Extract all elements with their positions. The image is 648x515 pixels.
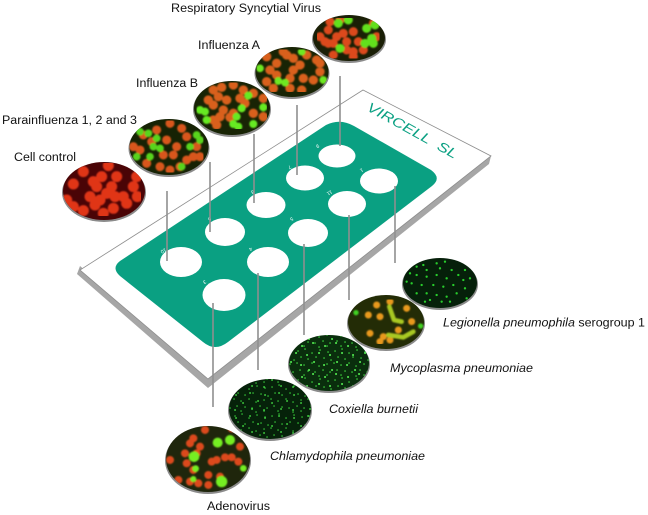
well numbers: 1 — [358, 166, 364, 173]
well numbers: 8 — [249, 188, 255, 195]
well numbers: 9 — [314, 142, 320, 149]
disc: adenovirus — [165, 426, 251, 494]
disc: coxiella — [288, 335, 370, 393]
label: mycoplasma: Mycoplasma pneumoniae — [390, 363, 533, 375]
label: coxiella: Coxiella burnetii — [329, 404, 418, 416]
disc: RSV — [312, 15, 386, 63]
disc: influenza B — [193, 81, 271, 137]
label: cell control: Cell control — [14, 152, 76, 164]
label: influenza A: Influenza A — [198, 40, 260, 52]
disc: influenza A — [254, 47, 330, 99]
well numbers: 10 — [159, 246, 167, 254]
well numbers: 5 — [288, 215, 294, 222]
slide — [77, 90, 491, 388]
slide green panel with wells — [116, 122, 437, 347]
well numbers: 11 — [325, 188, 333, 196]
disc: mycoplasma — [347, 295, 425, 351]
label: adenovirus: Adenovirus — [207, 501, 270, 513]
well numbers: 4 — [247, 245, 253, 252]
well numbers: 7 — [286, 163, 292, 170]
label: parainfluenza: Parainfluenza 1, 2 and 3 — [2, 115, 137, 127]
label: respiratory syncytial virus: Respiratory Syncytial Virus — [171, 3, 321, 15]
well numbers: 6 — [206, 215, 212, 222]
disc: parainfluenza — [128, 119, 210, 177]
well numbers: 3 — [201, 278, 207, 285]
connector lines — [167, 76, 395, 407]
well numbers — [159, 142, 364, 285]
brand text on slide: VIRCELL SL — [365, 100, 460, 162]
label: chlamydophila: Chlamydophila pneumoniae — [270, 451, 425, 463]
disc: chlamydophila — [228, 379, 312, 441]
disc: legionella — [402, 258, 478, 310]
label: legionella: Legionella pneumophila serogroup 1 — [443, 318, 645, 330]
label: influenza B: Influenza B — [136, 78, 198, 90]
disc: cell control — [62, 162, 146, 222]
